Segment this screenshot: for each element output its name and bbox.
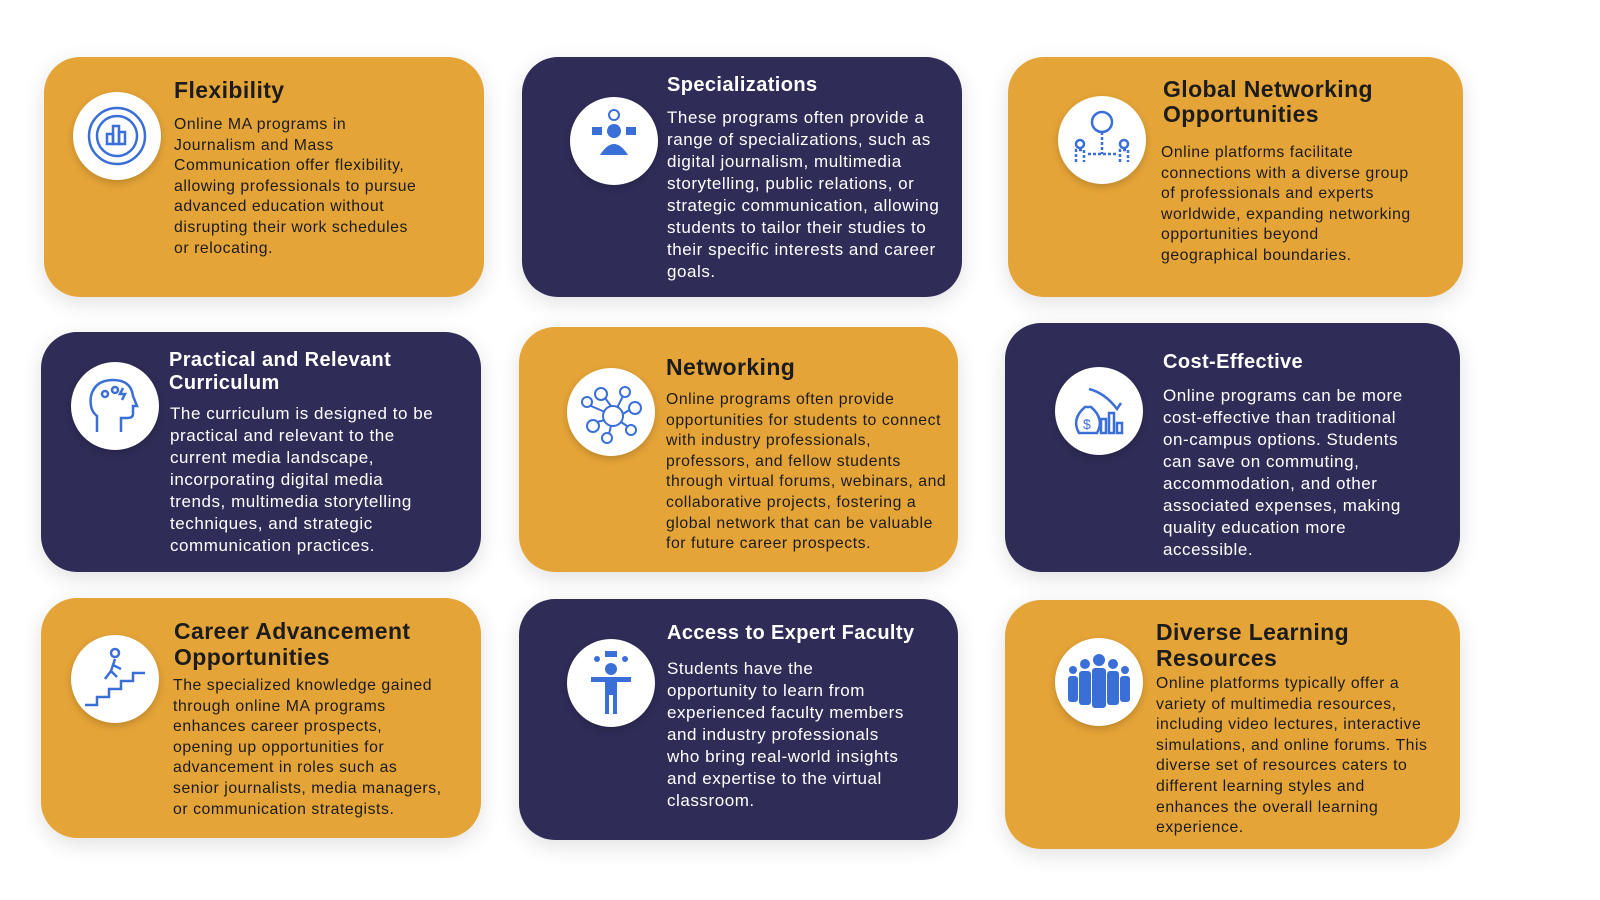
body text: on-campus options. Students: [1163, 430, 1398, 449]
title: [1156, 619, 1349, 671]
body text: collaborative projects, fostering a: [666, 494, 916, 511]
body text: Online MA programs in: [174, 116, 346, 133]
title: Specializations: [667, 74, 818, 96]
body text: goals.: [667, 262, 716, 281]
title: Access to Expert Faculty: [667, 622, 914, 644]
body text: or relocating.: [174, 240, 273, 257]
body text: advancement in roles such as: [173, 759, 397, 776]
icon: professor: [567, 639, 655, 727]
body text: [1161, 144, 1411, 264]
body text: senior journalists, media managers,: [173, 780, 442, 797]
card: Cost-Effective: [1005, 323, 1460, 572]
title: Curriculum: [169, 372, 280, 394]
title: Resources: [1156, 645, 1277, 671]
body text: opportunity to learn from: [667, 681, 865, 700]
card: Career Advancement: [41, 598, 481, 838]
icon: group of people: [1055, 638, 1143, 726]
body text: worldwide, expanding networking: [1161, 206, 1411, 223]
body text: accommodation, and other: [1163, 474, 1378, 493]
body text: [667, 659, 904, 810]
body text: simulations, and online forums. This: [1156, 737, 1428, 754]
body text: strategic communication, allowing: [667, 196, 939, 215]
body text: through online MA programs: [173, 698, 386, 715]
body text: quality education more: [1163, 518, 1346, 537]
icon: stairs climber: [71, 635, 159, 723]
title: [1163, 76, 1373, 127]
body text: opportunities beyond: [1161, 226, 1319, 243]
title: Cost-Effective: [1163, 351, 1303, 373]
body text: Students have the: [667, 659, 813, 678]
body text: storytelling, public relations, or: [667, 174, 914, 193]
card: Practical and Relevant Curriculum: [41, 332, 481, 572]
title: [169, 349, 391, 394]
body text: trends, multimedia storytelling: [170, 492, 412, 511]
body text: [666, 391, 946, 552]
body text: The curriculum is designed to be: [170, 404, 433, 423]
body text: [1156, 675, 1428, 836]
body text: geographical boundaries.: [1161, 247, 1352, 264]
body text: including video lectures, interactive: [1156, 716, 1421, 733]
body text: with industry professionals,: [666, 432, 871, 449]
body text: different learning styles and: [1156, 778, 1365, 795]
body text: enhances career prospects,: [173, 718, 382, 735]
body text: professors, and fellow students: [666, 453, 901, 470]
body text: their specific interests and career: [667, 240, 936, 259]
icon: student: [570, 97, 658, 185]
body text: variety of multimedia resources,: [1156, 696, 1397, 713]
title: Diverse Learning: [1156, 619, 1349, 645]
body text: [1163, 386, 1403, 559]
body text: [174, 116, 416, 257]
body text: digital journalism, multimedia: [667, 152, 902, 171]
title: Practical and Relevant: [169, 349, 391, 371]
body text: classroom.: [667, 791, 755, 810]
card: Specializations: [522, 57, 962, 297]
body text: and expertise to the virtual: [667, 769, 882, 788]
title: [174, 618, 410, 670]
card: Flexibility: [44, 57, 484, 297]
body text: Online programs can be more: [1163, 386, 1403, 405]
body text: Journalism and Mass: [174, 137, 334, 154]
title: Opportunities: [1163, 101, 1319, 127]
body text: accessible.: [1163, 540, 1253, 559]
body text: advanced education without: [174, 198, 384, 215]
body text: and industry professionals: [667, 725, 879, 744]
body text: of professionals and experts: [1161, 185, 1374, 202]
icon: money bag chart: $: [1083, 416, 1091, 432]
body text: Online platforms typically offer a: [1156, 675, 1399, 692]
body text: Online platforms facilitate: [1161, 144, 1353, 161]
title: Opportunities: [174, 644, 330, 670]
body text: for future career prospects.: [666, 535, 871, 552]
body text: cost-effective than traditional: [1163, 408, 1396, 427]
body text: can save on commuting,: [1163, 452, 1359, 471]
body text: diverse set of resources caters to: [1156, 757, 1407, 774]
icon: head: [71, 362, 159, 450]
body text: The specialized knowledge gained: [173, 677, 432, 694]
body text: enhances the overall learning: [1156, 799, 1378, 816]
body text: disrupting their work schedules: [174, 219, 408, 236]
card: Diverse Learning Resources: [1005, 600, 1460, 849]
body text: practical and relevant to the: [170, 426, 395, 445]
body text: incorporating digital media: [170, 470, 383, 489]
card: Access to Expert Faculty: [519, 599, 958, 840]
body text: experienced faculty members: [667, 703, 904, 722]
body text: through virtual forums, webinars, and: [666, 473, 946, 490]
card: Networking: [519, 327, 958, 572]
body text: students to tailor their studies to: [667, 218, 926, 237]
body text: who bring real-world insights: [667, 747, 898, 766]
icon: bar chart circle: [73, 92, 161, 180]
icon: network: [567, 368, 655, 456]
body text: opportunities for students to connect: [666, 412, 941, 429]
body text: global network that can be valuable: [666, 515, 933, 532]
body text: techniques, and strategic: [170, 514, 373, 533]
icon: money bag chart: [1055, 367, 1143, 455]
body text: connections with a diverse group: [1161, 165, 1409, 182]
body text: [170, 404, 433, 555]
body text: opening up opportunities for: [173, 739, 384, 756]
icon: networking gear: [1058, 96, 1146, 184]
body text: communication practices.: [170, 536, 375, 555]
body text: or communication strategists.: [173, 801, 394, 818]
body text: Online programs often provide: [666, 391, 894, 408]
body text: associated expenses, making: [1163, 496, 1401, 515]
body text: These programs often provide a: [667, 108, 924, 127]
title: Networking: [666, 354, 795, 380]
body text: range of specializations, such as: [667, 130, 931, 149]
body text: [667, 108, 939, 281]
body text: allowing professionals to pursue: [174, 178, 416, 195]
card: Global Networking: [1008, 57, 1463, 297]
body text: experience.: [1156, 819, 1244, 836]
body text: Communication offer flexibility,: [174, 157, 404, 174]
title: Global Networking: [1163, 76, 1373, 102]
body text: current media landscape,: [170, 448, 374, 467]
title: Flexibility: [174, 77, 284, 103]
body text: [173, 677, 442, 818]
title: Career Advancement: [174, 618, 410, 644]
